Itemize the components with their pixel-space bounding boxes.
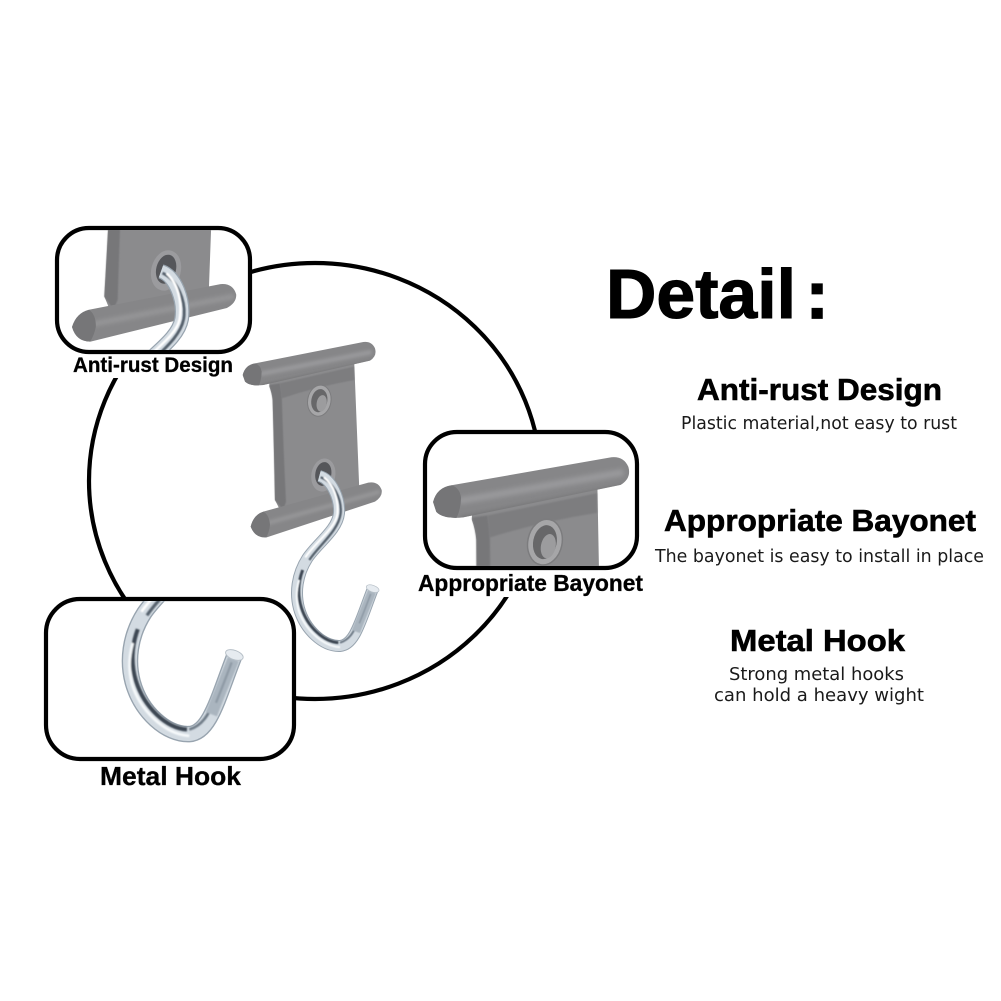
heading: Detail: : [806,258,828,333]
label: Metal Hook: Metal Hook [100,761,242,791]
text block: anti-rust design: Anti-rust Design [697,372,942,407]
text block: appropriate bayonet: Appropriate Bayonet [664,503,976,538]
panel: appropriate bayonet inset [422,430,640,570]
panel: anti-rust design inset [54,226,252,354]
text block: appropriate bayonet: The bayonet is easy to install in place [654,546,984,567]
panel: metal hook inset [44,596,296,762]
text block: metal hook: Strong metal hooks [729,664,904,685]
label: Appropriate Bayonet: Appropriate Bayonet [418,570,643,596]
text block: metal hook: can hold a heavy wight [714,685,924,706]
heading: Detail: Detail [606,255,796,333]
large circle outline [89,263,541,699]
main product: bracket with S hook [243,342,382,647]
text block: appropriate bayonet [654,503,984,567]
text block: metal hook: Metal Hook [730,623,906,658]
text block: anti-rust design: Plastic material,not easy to rust [681,413,957,434]
label: Anti-rust Design: Anti-rust Design [73,354,233,377]
text block: metal hook [714,623,924,706]
text block: anti-rust design [681,372,957,434]
